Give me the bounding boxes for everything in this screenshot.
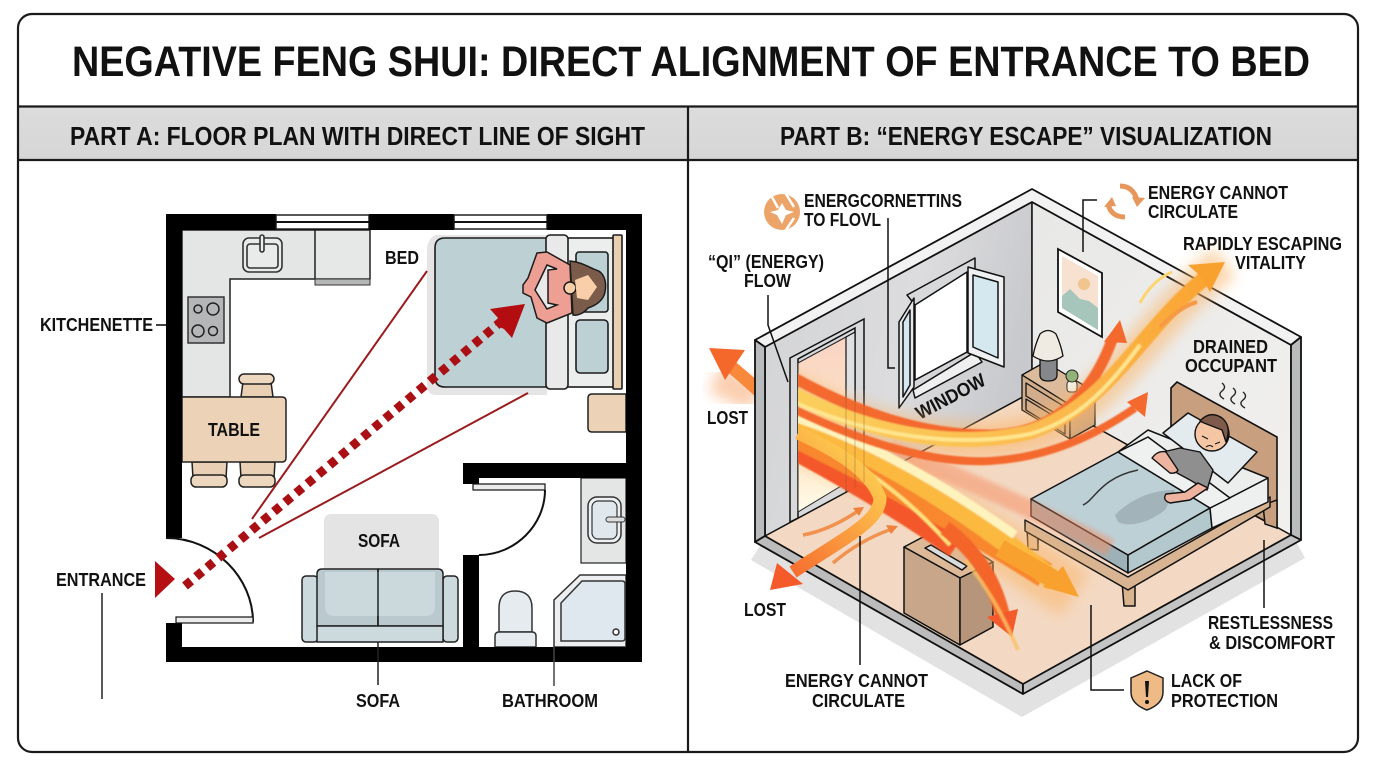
callout: rapidly escaping vitality — [1183, 234, 1342, 273]
heat squiggles — [1220, 383, 1246, 408]
label: bathroom: BATHROOM — [502, 691, 598, 711]
bed — [435, 235, 622, 389]
callout: rapidly escaping vitality: VITALITY — [1235, 253, 1306, 273]
energy flow: main stream to floor — [785, 414, 1055, 582]
headboard — [1171, 382, 1277, 528]
box on floor — [904, 528, 993, 645]
arrow: small inflow one — [803, 507, 864, 535]
callout: lack of protection: LACK OF — [1171, 671, 1242, 691]
arrow: lost through wall upper left — [709, 348, 760, 398]
label: lost lower: LOST — [744, 600, 786, 620]
cone of sight lines — [252, 271, 528, 538]
arrow: red down to floor — [945, 528, 1018, 637]
callout: lack of protection: PROTECTION — [1171, 691, 1278, 711]
streak pale yellow — [1140, 272, 1172, 303]
callout: energy cannot circulate upper — [1083, 183, 1288, 252]
label: bed: BED — [385, 248, 419, 268]
right wall — [1032, 202, 1291, 535]
drained occupant — [1152, 415, 1229, 503]
entrance door swing — [166, 538, 253, 623]
picture — [1058, 249, 1102, 337]
occupant: top-down person — [523, 252, 606, 323]
lamp — [1033, 330, 1063, 381]
callout: restlessness and discomfort — [1208, 540, 1335, 653]
heading: part A: PART A: FLOOR PLAN WITH DIRECT LINE OF SIGHT — [70, 121, 645, 151]
energy flow: glow — [780, 262, 1225, 595]
windows — [276, 215, 547, 229]
energy flow: peach stream to bed — [890, 450, 1110, 548]
callout: drained occupant — [1185, 337, 1277, 376]
callout: restlessness and discomfort: RESTLESSNESS — [1208, 613, 1333, 633]
callout: energy cannot circulate upper: CIRCULATE — [1148, 202, 1238, 222]
bathroom sink counter — [581, 478, 626, 563]
icon: kitchen sink — [243, 235, 282, 272]
walls — [166, 214, 642, 662]
panel: floor plan — [40, 214, 642, 711]
label: entrance — [56, 570, 146, 699]
blanket fold — [1083, 470, 1175, 524]
callout: qi energy flow: FLOW — [744, 271, 791, 291]
label: lost upper: LOST — [707, 408, 748, 428]
window — [899, 258, 1004, 408]
callout: drained occupant: OCCUPANT — [1185, 356, 1277, 376]
callout: drained occupant: DRAINED — [1193, 337, 1268, 357]
arrow: lower orange head — [1127, 392, 1148, 417]
panel: isometric energy escape room — [707, 183, 1342, 717]
icon: entrance triangle — [155, 561, 175, 598]
callout: restlessness and discomfort: & DISCOMFORT — [1209, 633, 1335, 653]
label: window: WINDOW — [912, 370, 989, 424]
left wall — [765, 202, 1032, 536]
heading: part B: PART B: “ENERGY ESCAPE” VISUALIZATION — [780, 121, 1272, 151]
callout: energy cannot circulate lower — [785, 536, 928, 711]
toilet — [495, 591, 536, 647]
energy flow: upper stream — [785, 278, 1205, 461]
callout: qi energy flow: “QI” (ENERGY) — [708, 252, 824, 272]
callout: lack of protection — [1091, 605, 1278, 711]
nightstand — [1022, 362, 1095, 439]
nightstand — [588, 394, 626, 432]
appliance — [315, 230, 370, 285]
arrow: vitality main head — [1188, 262, 1225, 292]
arrow: yellow to bed side — [1000, 548, 1079, 597]
callout: energy connecting to flow: TO FLOVL — [804, 210, 881, 230]
bed shadow — [427, 235, 547, 395]
panel header: part B background — [688, 107, 1357, 160]
label: entrance: ENTRANCE — [56, 570, 146, 590]
icon: stove — [188, 297, 224, 343]
streak near wall — [1160, 302, 1197, 327]
streak yellow down — [965, 560, 1018, 650]
callout: energy connecting to flow — [764, 191, 962, 368]
label: sofa — [356, 642, 400, 711]
shower — [554, 575, 626, 647]
callout: rapidly escaping vitality: RAPIDLY ESCAPING — [1183, 234, 1342, 254]
plant — [1066, 370, 1078, 392]
sofa backdrop label — [324, 514, 439, 574]
door frame seen through flow — [846, 390, 864, 492]
kitchen counter — [182, 230, 316, 397]
arrow: lost lower left — [770, 433, 880, 590]
sofa backdrop label: SOFA — [358, 531, 400, 551]
panel header: part A background — [19, 107, 688, 160]
callout: qi energy flow — [708, 252, 824, 382]
label: bathroom — [502, 647, 598, 711]
wall caps and slabs — [755, 189, 1301, 694]
bathroom door swing — [473, 484, 545, 555]
label: sofa: SOFA — [356, 691, 400, 711]
callout: energy cannot circulate lower: CIRCULATE — [812, 691, 905, 711]
label: kitchenette: KITCHENETTE — [40, 315, 153, 335]
arrow: small inflow two — [833, 525, 898, 563]
callout: energy connecting to flow: ENERGCORNETTINS — [804, 191, 962, 211]
label: table: TABLE — [208, 420, 260, 440]
arrow: upper orange head — [1104, 320, 1127, 343]
callout: energy cannot circulate lower: ENERGY CANNOT — [785, 671, 928, 691]
ground shadow — [751, 530, 1305, 717]
callout: energy cannot circulate upper: ENERGY CANNOT — [1148, 183, 1288, 203]
floor — [765, 392, 1291, 684]
sofa — [302, 569, 458, 642]
door opening — [790, 319, 864, 522]
table with chairs — [182, 374, 286, 487]
pillow — [1163, 413, 1257, 483]
bed — [1025, 430, 1277, 606]
arrow: direct line of sight — [185, 304, 525, 586]
